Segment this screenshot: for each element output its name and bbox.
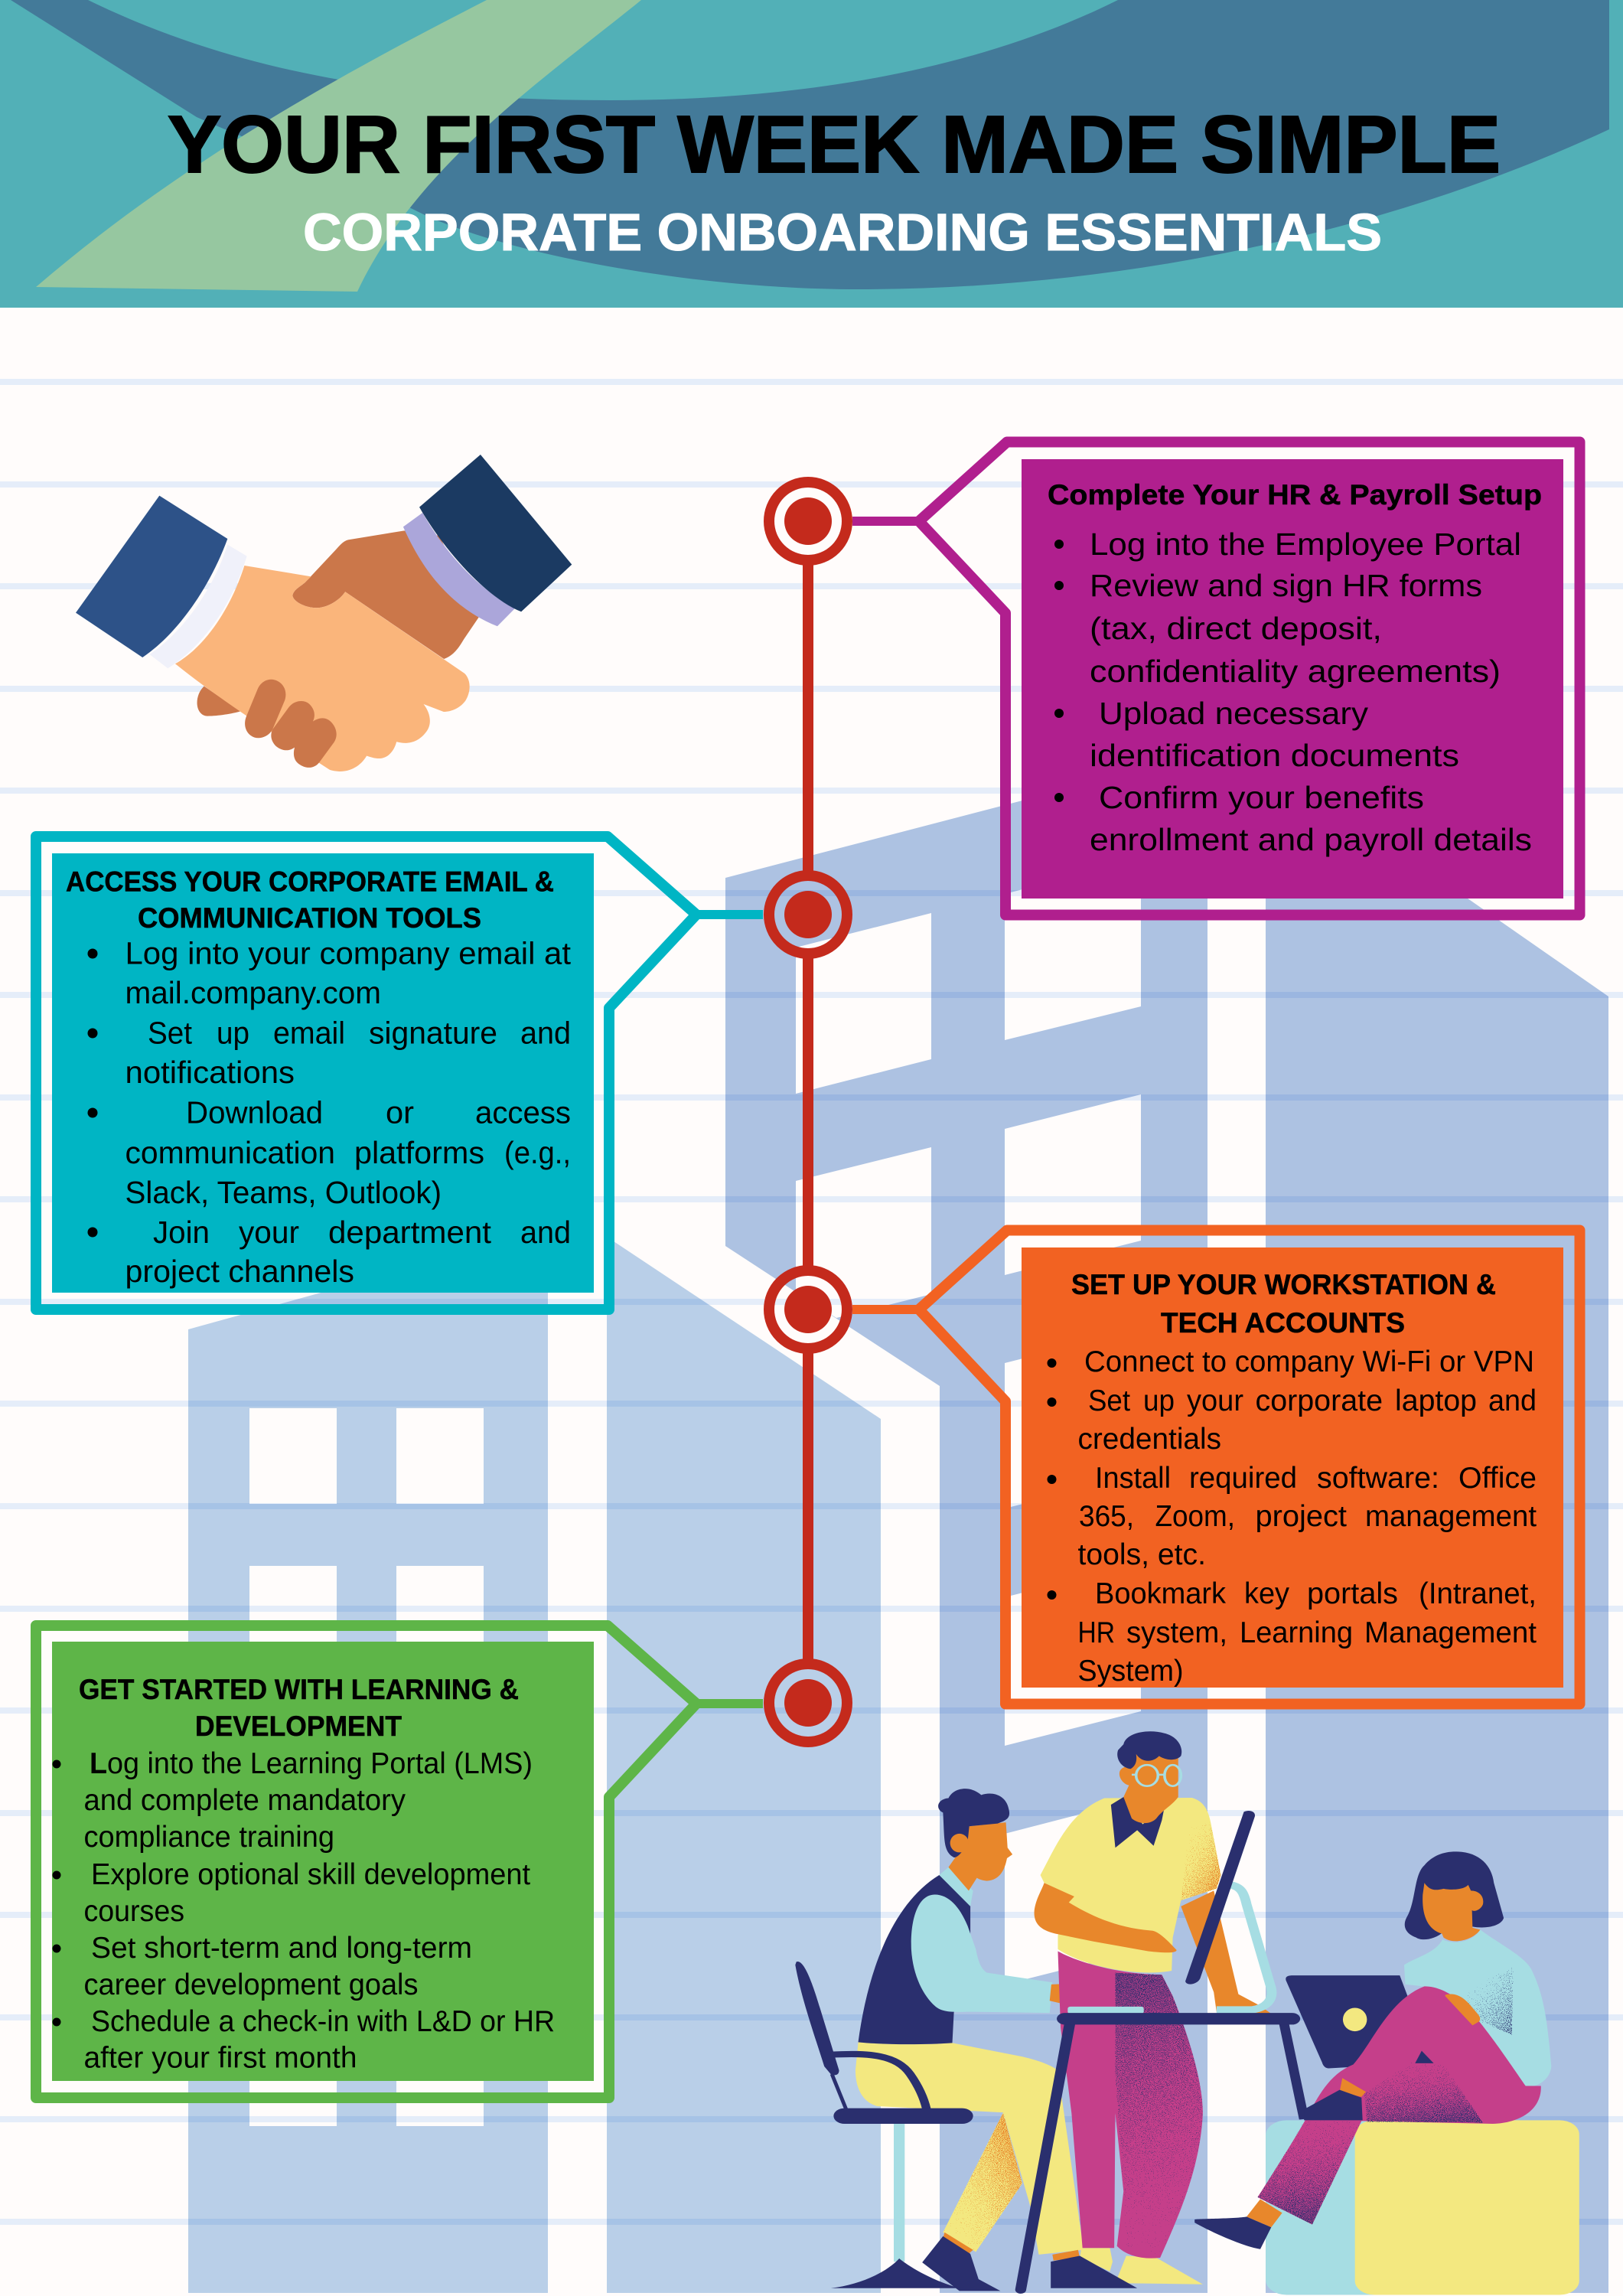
desk and monitor <box>1021 1811 1304 2290</box>
list: workstation tasks: 365, <box>1079 1500 1134 1533</box>
list: email tasks: project channels <box>125 1254 354 1289</box>
list: HR and payroll tasks <box>1054 527 1532 857</box>
list: HR and payroll tasks: identification documents <box>1090 738 1459 773</box>
list: workstation tasks: Management <box>1364 1616 1537 1649</box>
list: learning tasks <box>52 1747 555 2074</box>
list: email tasks: (e.g., <box>504 1135 571 1170</box>
list: email tasks: mail.company.com <box>125 975 381 1010</box>
list: learning tasks: Schedule a check-in with L&D or HR <box>91 2005 555 2038</box>
list: workstation tasks: required <box>1189 1462 1297 1495</box>
list: workstation tasks: project <box>1255 1500 1347 1533</box>
title: YOUR FIRST WEEK MADE SIMPLE <box>168 99 1501 190</box>
panel: learning and development <box>36 1626 763 2098</box>
list: HR and payroll tasks: Confirm your benefits <box>1099 780 1424 815</box>
list: learning tasks: and complete mandatory <box>84 1784 406 1817</box>
list: HR and payroll tasks: confidentiality agreements) <box>1090 654 1501 689</box>
list: email tasks: Log into your company email at <box>125 935 572 970</box>
heading: learning: DEVELOPMENT <box>195 1711 402 1742</box>
list: workstation tasks: Set <box>1088 1384 1130 1417</box>
person: standing man with glasses <box>1035 1731 1271 2288</box>
list: workstation tasks <box>1047 1345 1537 1688</box>
illustration: team at desk <box>795 1731 1579 2294</box>
heading: learning: GET STARTED WITH LEARNING & <box>79 1674 519 1705</box>
list: email tasks: access <box>475 1094 571 1130</box>
icon: handshake <box>76 455 572 771</box>
list: workstation tasks: Zoom, <box>1155 1500 1235 1533</box>
list: HR and payroll tasks: Log into the Employee Portal <box>1090 527 1521 562</box>
timeline node 2 <box>769 876 847 954</box>
timeline node 3 <box>769 1270 847 1349</box>
list: HR and payroll tasks: Upload necessary <box>1099 696 1369 731</box>
list: learning tasks: career development goals <box>84 1968 418 2001</box>
list: learning tasks: Log into the Learning Portal (LMS) <box>90 1747 533 1780</box>
heading: learning <box>79 1674 519 1742</box>
list: workstation tasks: Install <box>1095 1462 1171 1495</box>
list: workstation tasks: HR <box>1077 1616 1115 1649</box>
list: workstation tasks: your <box>1187 1384 1243 1417</box>
list: email tasks: your <box>239 1215 299 1250</box>
list: workstation tasks: Bookmark <box>1095 1577 1226 1610</box>
heading: workstation: TECH ACCOUNTS <box>1161 1307 1405 1339</box>
list: HR and payroll tasks: Review and sign HR forms <box>1090 568 1482 603</box>
list: email tasks: email <box>273 1015 345 1050</box>
list: learning tasks: Explore optional skill development <box>91 1858 530 1891</box>
heading: email and tools <box>66 866 554 934</box>
list: email tasks: or <box>386 1094 414 1130</box>
list: workstation tasks: management <box>1365 1500 1537 1533</box>
timeline node 4 <box>769 1664 847 1742</box>
list: email tasks: and <box>520 1015 571 1050</box>
list: email tasks: communication <box>125 1135 335 1170</box>
list: workstation tasks: (Intranet, <box>1419 1577 1537 1610</box>
subtitle: CORPORATE ONBOARDING ESSENTIALS <box>303 203 1382 262</box>
list: workstation tasks: software: <box>1317 1462 1439 1495</box>
list: workstation tasks: portals <box>1307 1577 1398 1610</box>
list: email tasks: Set <box>148 1015 193 1050</box>
heading: workstation: SET UP YOUR WORKSTATION & <box>1071 1269 1496 1300</box>
panel: workstation and tech accounts <box>852 1231 1579 1704</box>
heading: email and tools: ACCESS YOUR CORPORATE EMAIL & <box>66 866 554 897</box>
heading: HR and payroll: Complete Your HR & Payroll Setup <box>1048 479 1542 510</box>
list: workstation tasks: Connect to company Wi-Fi or VPN <box>1084 1345 1534 1378</box>
list: workstation tasks: system, <box>1126 1616 1227 1649</box>
background buildings <box>188 752 1608 2293</box>
panel: HR and payroll setup <box>852 442 1579 915</box>
list: learning tasks: courses <box>84 1895 184 1928</box>
list: email tasks: department <box>328 1215 492 1250</box>
list: workstation tasks: corporate <box>1255 1384 1383 1417</box>
list: workstation tasks: Office <box>1458 1462 1537 1495</box>
list: email tasks: Join <box>153 1215 210 1250</box>
list: email tasks: signature <box>369 1015 497 1050</box>
header banner <box>0 0 1623 308</box>
heading: workstation <box>1071 1269 1496 1339</box>
list: workstation tasks: laptop <box>1395 1384 1477 1417</box>
list: workstation tasks: System) <box>1077 1655 1183 1688</box>
list: workstation tasks: key <box>1244 1577 1289 1610</box>
person: seated man with chair <box>795 1789 1110 2291</box>
list: HR and payroll tasks: enrollment and payroll details <box>1090 822 1532 857</box>
list: learning tasks: Set short-term and long-term <box>91 1932 472 1965</box>
list: workstation tasks: tools, etc. <box>1077 1538 1206 1571</box>
timeline node 1 <box>769 482 847 560</box>
list: email tasks: notifications <box>125 1055 295 1090</box>
heading: email and tools: COMMUNICATION TOOLS <box>138 902 481 934</box>
list: learning tasks: after your first month <box>84 2042 357 2074</box>
list: email tasks: up <box>217 1015 249 1050</box>
list: email tasks: Download <box>186 1094 323 1130</box>
list: learning tasks: compliance training <box>84 1821 334 1854</box>
person: seated woman with laptop <box>1194 1851 1551 2249</box>
list: email tasks: and <box>520 1215 571 1250</box>
list: email tasks: Slack, Teams, Outlook) <box>125 1175 442 1210</box>
list: email tasks <box>87 935 572 1289</box>
timeline spine <box>803 563 813 1665</box>
list: email tasks: platforms <box>354 1135 484 1170</box>
list: HR and payroll tasks: (tax, direct deposit, <box>1090 611 1382 646</box>
panel: corporate email and communication tools <box>36 837 763 1309</box>
list: workstation tasks: credentials <box>1077 1423 1221 1456</box>
list: workstation tasks: Learning <box>1240 1616 1353 1649</box>
list: workstation tasks: up <box>1143 1384 1175 1417</box>
seating cubes <box>1266 2120 1579 2294</box>
list: workstation tasks: and <box>1488 1384 1537 1417</box>
